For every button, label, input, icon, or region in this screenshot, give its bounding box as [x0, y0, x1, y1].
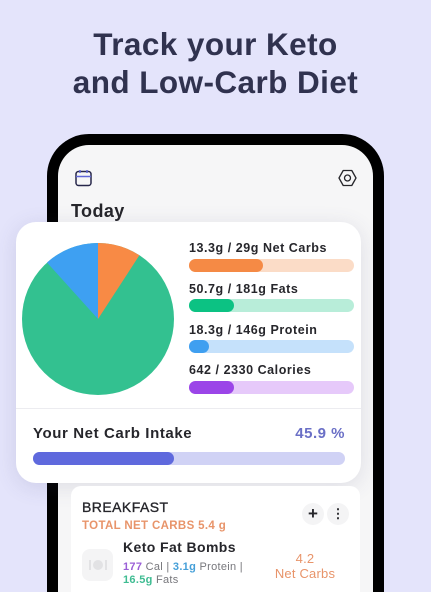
title — [73, 26, 358, 100]
food thumbnail — [82, 549, 113, 581]
net carb intake bar — [33, 452, 345, 465]
macro: fats: 50.7g / 181g Fats — [189, 282, 298, 296]
food macros — [123, 561, 243, 586]
macro: fats — [189, 282, 354, 312]
icon: settings — [338, 170, 357, 186]
macro: calories — [189, 363, 354, 394]
phone frame — [47, 134, 384, 592]
food macros: 177 Cal | 3.1g Protein | — [123, 561, 243, 573]
title: Track your Keto — [93, 26, 338, 62]
food net carbs: 4.2 — [296, 551, 314, 566]
food name: Keto Fat Bombs — [123, 539, 236, 555]
total net carbs: TOTAL NET CARBS 5.4 g — [82, 520, 226, 532]
more button — [327, 503, 349, 525]
breakfast heading: BREAKFAST — [82, 499, 169, 515]
title: and Low-Carb Diet — [73, 64, 358, 100]
phone screen — [58, 145, 373, 592]
add button: + — [308, 504, 318, 523]
more button: ⋮ — [332, 506, 344, 521]
add button — [302, 503, 324, 525]
macro: calories: 642 / 2330 Calories — [189, 363, 311, 377]
panel: breakfast — [71, 486, 360, 592]
heading: today: Today — [71, 201, 125, 221]
macro: net carbs: 13.3g / 29g Net Carbs — [189, 241, 327, 255]
pie chart — [22, 243, 174, 395]
panel: nutrition summary — [16, 222, 361, 483]
net carb intake label: Your Net Carb Intake — [33, 425, 192, 442]
net carb intake percent: 45.9 % — [295, 425, 345, 442]
macro: net carbs — [189, 241, 354, 272]
food macros: 16.5g Fats — [123, 574, 179, 586]
icon: calendar — [75, 170, 92, 186]
macro: protein — [189, 323, 354, 353]
food net carbs — [275, 551, 335, 581]
food net carbs: Net Carbs — [275, 566, 335, 581]
macro: protein: 18.3g / 146g Protein — [189, 323, 317, 337]
